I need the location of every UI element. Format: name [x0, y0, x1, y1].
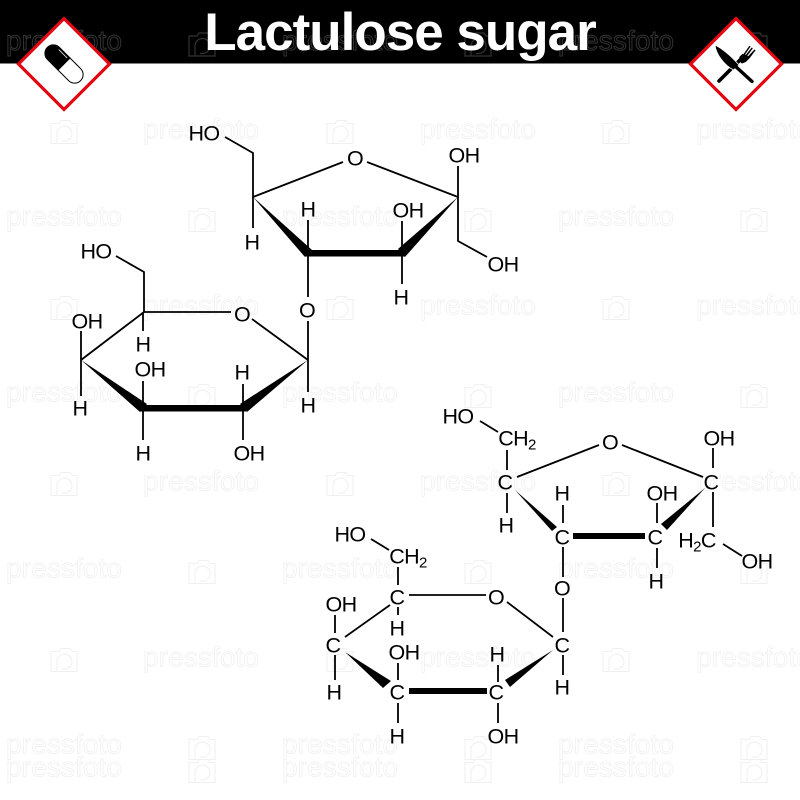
atom labels, skeletal: OH — [233, 442, 265, 466]
atom labels, skeletal: O — [234, 302, 250, 326]
atom labels, full formula: H — [499, 514, 513, 538]
atom labels, full formula: 2 — [419, 554, 427, 572]
watermarks on page: pressfoto — [6, 376, 122, 408]
furanose ring, skeletal — [81, 137, 487, 440]
watermarks on page: pressfoto — [143, 290, 259, 320]
atom labels, full formula: OH — [741, 550, 773, 574]
watermarks on header: pressfoto — [6, 25, 122, 56]
atom labels, full formula: C — [555, 634, 570, 658]
atom labels, full formula: C — [326, 634, 341, 658]
atom labels, full formula: O — [488, 586, 504, 610]
watermarks on page: pressfoto — [6, 728, 122, 760]
atom labels, full formula: H — [649, 570, 663, 594]
atom labels, full formula: CH — [389, 544, 419, 568]
bonds, full formula — [335, 421, 742, 723]
atom labels, full formula: OH — [487, 724, 519, 748]
atom labels, skeletal: OH — [134, 358, 166, 382]
atom labels, full formula: C — [704, 470, 719, 494]
watermarks on header: pressfoto — [558, 25, 674, 56]
watermarks on page: pressfoto — [282, 752, 398, 782]
atom labels, skeletal: OH — [487, 252, 519, 276]
atom labels, full formula: H — [555, 482, 569, 506]
atom labels, skeletal: H — [245, 230, 259, 254]
atom labels, skeletal: H — [136, 332, 150, 356]
atom labels, full formula: C — [701, 528, 716, 552]
atom labels, full formula: OH — [388, 640, 420, 664]
atom labels, skeletal: O — [299, 298, 315, 322]
atom labels, skeletal: H — [235, 360, 249, 384]
atom labels, full formula: C — [648, 526, 663, 550]
watermarks on page: pressfoto — [558, 728, 674, 760]
atom labels, full formula: CH — [498, 426, 528, 450]
atom labels, full formula: H — [390, 724, 404, 748]
atom labels, full formula: O — [554, 576, 570, 600]
watermarks on page: pressfoto — [420, 466, 536, 496]
atom labels, full formula: C — [390, 586, 405, 610]
watermarks on header: pressfoto — [282, 25, 398, 56]
atom labels, skeletal: O — [347, 146, 363, 170]
atom labels, full formula: C — [390, 680, 405, 704]
atom labels, full formula: 2 — [693, 538, 701, 556]
watermarks on page: pressfoto — [282, 552, 398, 584]
atom labels, skeletal: H — [301, 198, 315, 222]
atom labels, skeletal: OH — [448, 144, 480, 168]
atom labels, full formula: OH — [703, 426, 735, 450]
atom labels, skeletal: H — [136, 442, 150, 466]
watermarks on page: pressfoto — [143, 466, 259, 496]
atom labels, full formula — [325, 404, 773, 748]
atom labels, skeletal: H — [394, 286, 408, 310]
watermarks on page: pressfoto — [558, 752, 674, 782]
atom labels, full formula: H — [327, 680, 341, 704]
atom labels, full formula: OH — [646, 482, 678, 506]
icon: knife and fork badge — [690, 18, 782, 110]
watermarks on page: pressfoto — [420, 290, 536, 320]
watermarks on page: pressfoto — [282, 728, 398, 760]
atom labels, skeletal: H — [73, 396, 87, 420]
watermarks on page: pressfoto — [420, 114, 536, 144]
watermarks on page: pressfoto — [6, 552, 122, 584]
watermarks on page: pressfoto — [143, 642, 259, 672]
watermarks on page: pressfoto — [6, 200, 122, 232]
atom labels, full formula: OH — [325, 592, 357, 616]
watermarks on page: pressfoto — [558, 376, 674, 408]
atom labels, full formula: H — [390, 616, 404, 640]
atom labels, full formula: HO — [334, 522, 366, 546]
atom labels, full formula: C — [498, 470, 513, 494]
watermarks on page: pressfoto — [282, 376, 398, 408]
header band — [0, 0, 800, 64]
watermarks on page: pressfoto — [558, 200, 674, 232]
atom labels, full formula: H — [555, 676, 569, 700]
watermarks on page: pressfoto — [420, 642, 536, 672]
atom labels, skeletal: OH — [392, 198, 424, 222]
atom labels, full formula: O — [602, 430, 618, 454]
atom labels, skeletal — [71, 122, 519, 466]
structure: skeletal formula, top — [71, 122, 519, 466]
atom labels, full formula: C — [555, 526, 570, 550]
atom labels, skeletal: HO — [188, 122, 220, 146]
watermarks on page: pressfoto — [143, 114, 259, 144]
watermarks on header — [6, 25, 767, 56]
atom labels, full formula: H — [490, 642, 504, 666]
atom labels, full formula: H — [678, 528, 693, 552]
atom labels, skeletal: HO — [80, 240, 112, 264]
atom labels, full formula: HO — [442, 404, 474, 428]
watermarks on page: pressfoto — [558, 552, 674, 584]
atom labels, full formula: C — [489, 680, 504, 704]
watermarks on page: pressfoto — [282, 200, 398, 232]
atom labels, skeletal: H — [301, 394, 315, 418]
atom labels, full formula: 2 — [528, 436, 536, 454]
watermarks on page: pressfoto — [6, 752, 122, 782]
icon: medicine capsule badge — [18, 18, 110, 110]
structure: full formula, bottom — [325, 404, 773, 748]
title: Lactulose sugar — [204, 3, 596, 62]
atom labels, skeletal: OH — [71, 310, 103, 334]
